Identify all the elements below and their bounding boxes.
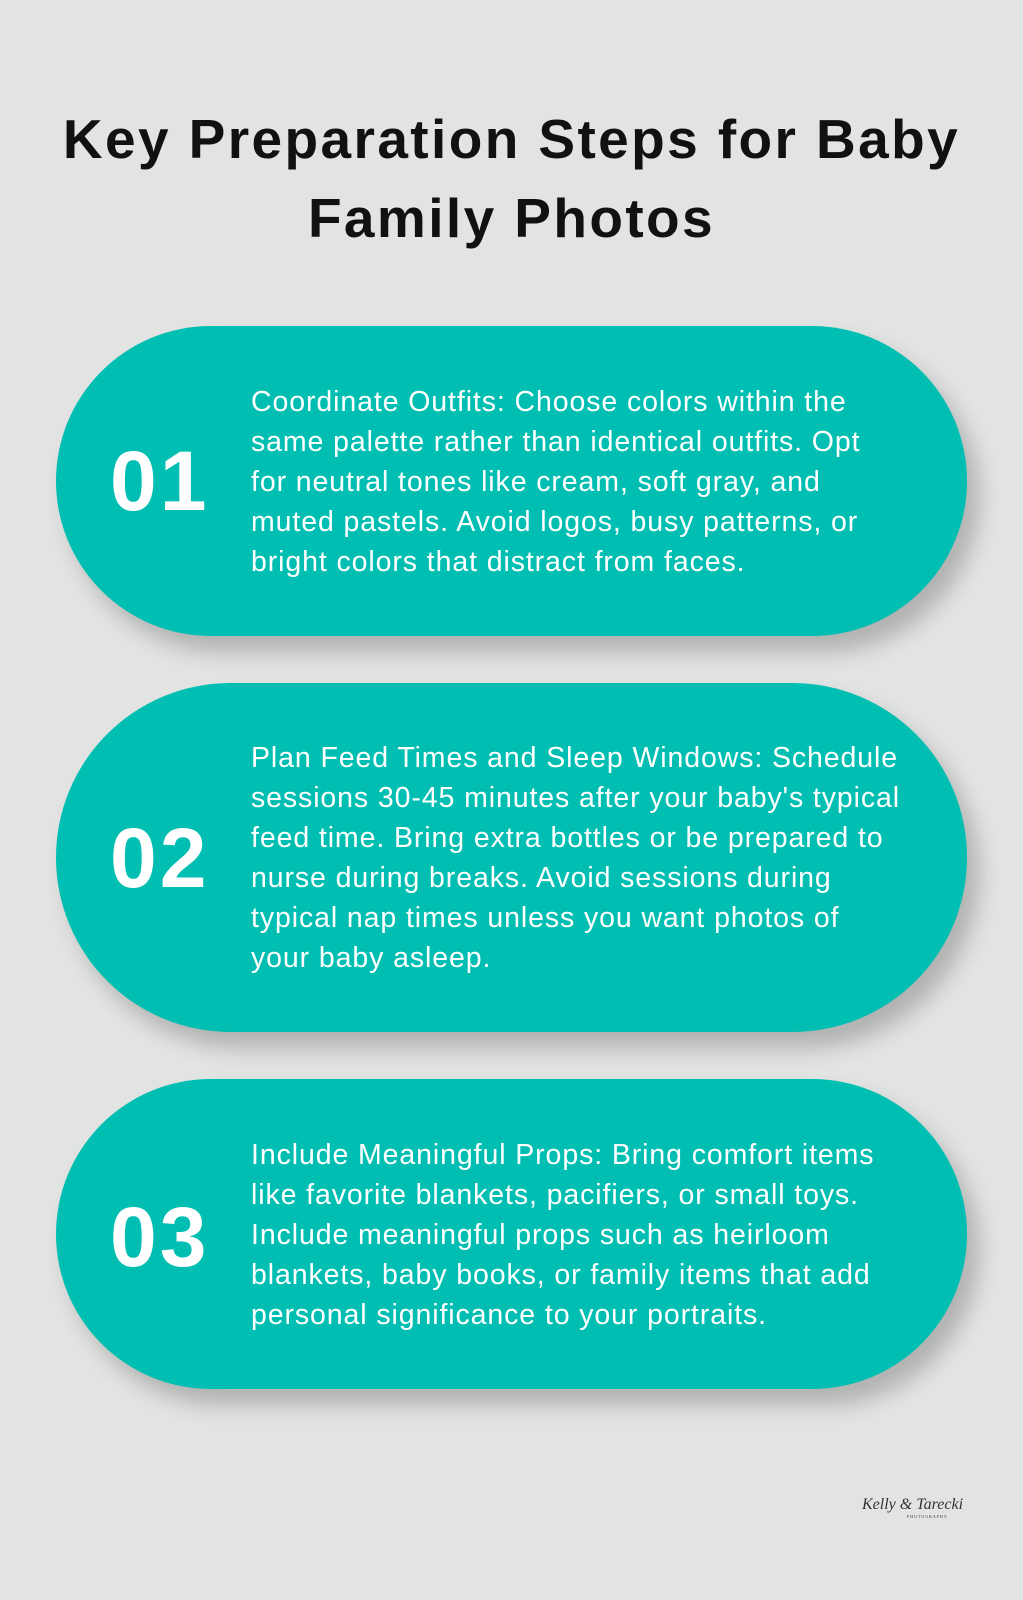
text: coordinate outfits: muted pastels. Avoid logos, busy patterns, or <box>251 506 858 538</box>
panel: step 3 <box>56 1079 967 1389</box>
text: feed and sleep: sessions 30-45 minutes after your baby's typical <box>251 782 900 814</box>
title: Key Preparation Steps for Baby <box>63 108 960 170</box>
text: meaningful props <box>251 1139 874 1331</box>
text: feed and sleep: feed time. Bring extra bottles or be prepared to <box>251 822 884 854</box>
text: coordinate outfits: bright colors that distract from faces. <box>251 546 745 578</box>
panel: step 1 <box>56 326 967 636</box>
text: coordinate outfits: Coordinate Outfits: Choose colors within the <box>251 386 847 418</box>
title <box>63 108 960 249</box>
text: feed and sleep <box>251 742 900 974</box>
text: meaningful props: Include Meaningful Props: Bring comfort items <box>251 1139 874 1171</box>
text: meaningful props: like favorite blankets, pacifiers, or small toys. <box>251 1179 859 1211</box>
title: Family Photos <box>308 187 715 249</box>
panel: step 2 <box>56 683 967 1032</box>
number 01: 01 <box>110 434 209 528</box>
text: coordinate outfits: same palette rather than identical outfits. Opt <box>251 426 860 458</box>
logo signature: PHOTOGRAPHY <box>907 1514 948 1519</box>
text: coordinate outfits: for neutral tones like cream, soft gray, and <box>251 466 821 498</box>
text: meaningful props: personal significance to your portraits. <box>251 1299 767 1331</box>
number 03: 03 <box>110 1190 209 1284</box>
number 02: 02 <box>110 811 209 905</box>
text: coordinate outfits <box>251 386 860 578</box>
text: feed and sleep: typical nap times unless you want photos of <box>251 902 839 934</box>
text: feed and sleep: nurse during breaks. Avoid sessions during <box>251 862 832 894</box>
text: meaningful props: Include meaningful props such as heirloom <box>251 1219 830 1251</box>
text: feed and sleep: your baby asleep. <box>251 942 491 974</box>
text: meaningful props: blankets, baby books, or family items that add <box>251 1259 871 1291</box>
text: feed and sleep: Plan Feed Times and Sleep Windows: Schedule <box>251 742 898 774</box>
logo signature: Kelly & Tarecki <box>862 1496 963 1513</box>
